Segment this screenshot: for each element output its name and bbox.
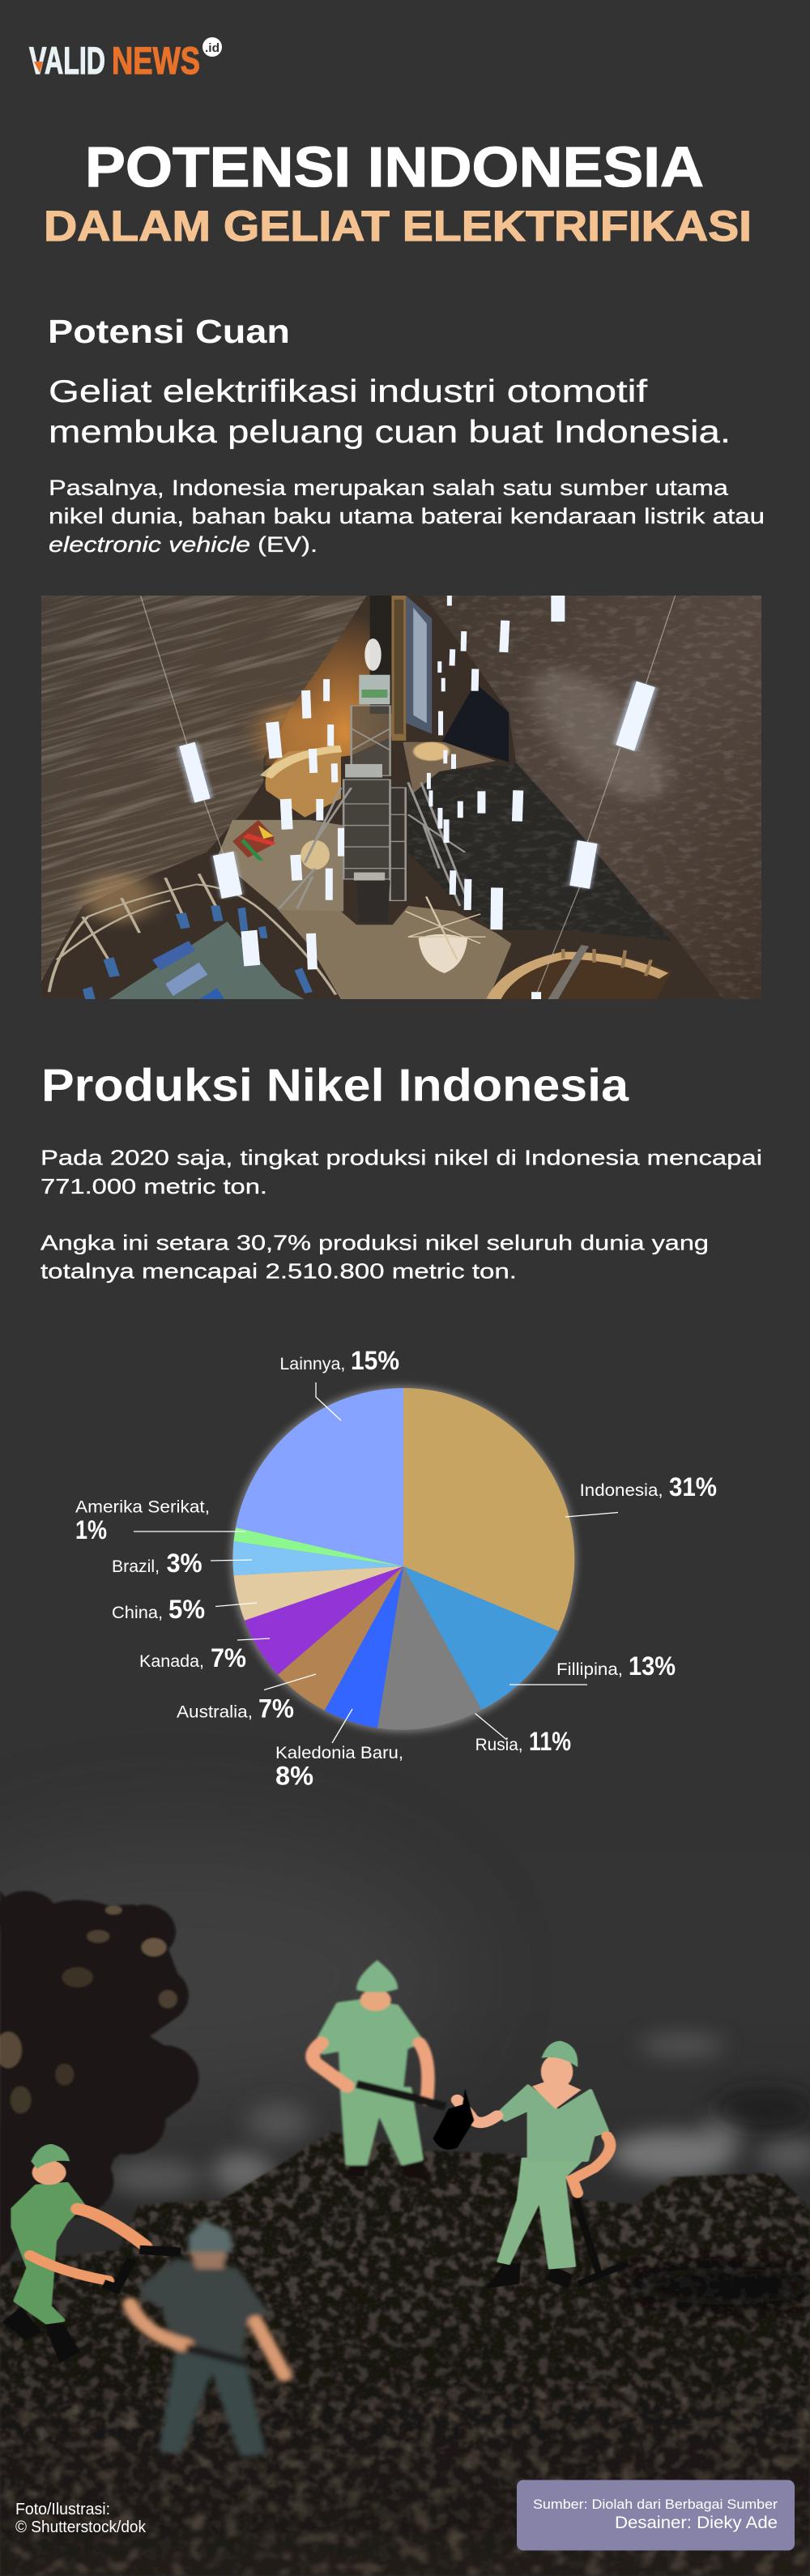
right wall — [424, 596, 761, 999]
dark cave opening — [441, 683, 509, 763]
curved exhibition wall — [265, 747, 341, 818]
pie slice: Lainnya — [236, 1388, 403, 1566]
label: Fillipina 13%: 13% — [629, 1651, 676, 1681]
body text: production figures: Pada 2020 saja, tingkat produksi nikel di Indonesia mencapai — [40, 1146, 762, 1170]
label: Indonesia 31% — [580, 1472, 717, 1502]
label: China 5%: China, — [112, 1604, 163, 1622]
pie glow — [231, 1386, 576, 1732]
title: POTENSI INDONESIA — [85, 135, 704, 199]
logo: Validnews.id: VALID — [29, 39, 105, 82]
body text: production figures: totalnya mencapai 2.510.800 metric ton. — [40, 1259, 517, 1284]
central elevator tower — [370, 596, 391, 714]
bottom photo: miniature miners on nickel ore — [0, 1857, 810, 2576]
lead text: membuka peluang cuan buat Indonesia. — [49, 415, 731, 450]
label: Australia 7%: Australia, — [177, 1703, 253, 1721]
pale floors — [275, 906, 512, 999]
section heading: Potensi Cuan: Potensi Cuan — [48, 313, 290, 350]
label: Lainnya 15% — [279, 1346, 399, 1375]
ping pong court — [109, 921, 305, 999]
left wall — [41, 596, 367, 981]
playground — [232, 820, 276, 861]
steel scaffolding — [279, 706, 467, 908]
label: Brazil 3%: Brazil, — [112, 1557, 160, 1576]
chart: world nickel production pie — [75, 1346, 717, 1791]
back wall with orange glow — [264, 616, 392, 767]
label: Fillipina 13%: Fillipina, — [556, 1660, 623, 1679]
label: Kanada 7%: 7% — [211, 1643, 246, 1672]
dark floor — [408, 763, 671, 941]
lead text: Geliat elektrifikasi industri otomotif — [49, 374, 647, 409]
pie slice: Fillipina — [403, 1566, 559, 1710]
logo: Validnews.id — [29, 37, 222, 82]
label: Indonesia 31%: Indonesia, — [580, 1481, 663, 1500]
carousel glow — [413, 742, 450, 761]
body text: nickel and EV — [49, 476, 765, 557]
lead text — [49, 374, 731, 450]
ground — [0, 2127, 810, 2576]
label: Amerika Serikat 1%: Amerika Serikat, — [75, 1497, 210, 1517]
label: Kaledonia Baru 8%: Kaledonia Baru, — [275, 1744, 403, 1762]
miner: left figure digging — [2, 2144, 181, 2364]
title: DALAM GELIAT ELEKTRIFIKASI — [44, 203, 752, 250]
body text: nickel and EV: Pasalnya, Indonesia merupakan salah satu sumber utama — [49, 476, 729, 500]
label: Kaledonia Baru 8%: 8% — [275, 1762, 313, 1791]
section heading: Produksi Nikel Indonesia: Produksi Nikel Indonesia — [41, 1060, 629, 1112]
railing left — [49, 874, 336, 995]
photo credit: Foto/Ilustrasi: — [15, 2501, 110, 2518]
logo: Validnews.id: NEWS — [112, 39, 200, 82]
hanging lamps glow — [187, 684, 646, 896]
body text: production figures: Angka ini setara 30,7% produksi nikel seluruh dunia yang — [40, 1231, 709, 1255]
ore rock on left — [0, 1891, 199, 2272]
body text: nickel and EV: nikel dunia, bahan baku utama baterai kendaraan listrik atau — [49, 504, 765, 528]
blurred background smoke — [109, 2031, 810, 2195]
label: Lainnya 15%: 15% — [351, 1346, 399, 1375]
photo: underground salt mine — [41, 596, 761, 999]
label: Kanada 7%: Kanada, — [139, 1652, 204, 1671]
pie slice: Rusia — [377, 1566, 482, 1730]
label: Australia 7% — [177, 1694, 294, 1723]
pie slice: Brazil — [232, 1541, 403, 1575]
wooden ring structure — [488, 945, 671, 999]
title — [44, 135, 752, 250]
label: Australia 7%: 7% — [258, 1694, 294, 1723]
miner: right figure with bottle — [433, 2041, 628, 2288]
leader lines — [134, 1382, 618, 1743]
pie slice: Kanada — [245, 1566, 403, 1675]
photo credit: © Shutterstock/dok — [15, 2518, 147, 2536]
backdrop — [0, 1766, 810, 2285]
source and designer box: Sumber: Diolah dari Berbagai Sumber — [533, 2497, 778, 2512]
miner: back figure — [313, 1960, 446, 2181]
label: Brazil 3% — [112, 1549, 202, 1578]
label: Rusia 11%: Rusia, — [475, 1736, 523, 1754]
body text: production figures: 771.000 metric ton. — [40, 1174, 267, 1198]
source and designer box — [517, 2480, 795, 2551]
label: Rusia 11%: 11% — [529, 1727, 571, 1756]
label: Rusia 11% — [475, 1727, 571, 1756]
label: China 5%: 5% — [168, 1595, 205, 1624]
body text: production figures — [40, 1146, 762, 1284]
miner: front blurred figure — [130, 2220, 284, 2456]
hanging lamps — [187, 596, 646, 999]
label: China 5% — [112, 1595, 205, 1624]
label: Indonesia 31%: 31% — [669, 1472, 717, 1502]
label: Lainnya 15%: Lainnya, — [279, 1355, 345, 1373]
pie slice: China — [233, 1566, 403, 1621]
suspension wires — [140, 596, 676, 992]
source and designer box: Desainer: Dieky Ade — [615, 2514, 778, 2532]
pie slice: Indonesia — [403, 1388, 574, 1631]
photo credit — [15, 2501, 147, 2536]
pie slice: Amerika Serikat — [233, 1527, 403, 1566]
windmill — [406, 896, 486, 973]
body text: nickel and EV: electronic vehicle (EV). — [49, 532, 318, 557]
pie slice: Kaledonia Baru — [325, 1566, 403, 1728]
label: Amerika Serikat 1%: 1% — [75, 1515, 107, 1544]
label: Brazil 3%: 3% — [167, 1549, 202, 1578]
pie slice: Australia — [278, 1566, 403, 1711]
label: Kanada 7% — [139, 1643, 246, 1672]
logo: Validnews.id: .id — [205, 41, 220, 55]
label: Amerika Serikat 1% — [75, 1497, 210, 1544]
label: Kaledonia Baru 8% — [275, 1744, 403, 1791]
label: Fillipina 13% — [556, 1651, 676, 1681]
